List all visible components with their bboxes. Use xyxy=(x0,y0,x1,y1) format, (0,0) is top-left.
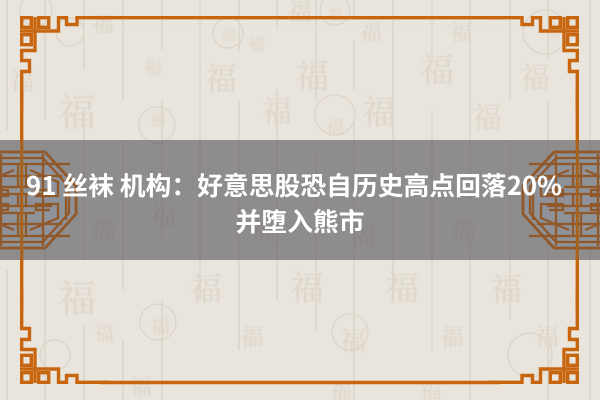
paper background with faint fu characters: 福 xyxy=(90,217,116,246)
paper background with faint fu characters: 福 xyxy=(248,35,265,54)
paper background with faint fu characters: 福 xyxy=(490,271,522,307)
paper background with faint fu characters: 福 xyxy=(221,27,236,44)
corner ornament: bottom right xyxy=(489,290,579,383)
frame lines across band xyxy=(22,140,577,260)
paper background with faint fu characters: 福 xyxy=(150,315,170,338)
paper background with faint fu characters: 福 xyxy=(450,217,476,246)
paper background with faint fu characters: 福 xyxy=(535,324,559,351)
paper background with faint fu characters: 福 xyxy=(295,59,329,96)
paper background with faint fu characters: 福 xyxy=(144,58,162,78)
left lattice medallion xyxy=(0,152,76,248)
corner ornament: top left xyxy=(20,17,110,110)
paper background with faint fu characters: 福 xyxy=(385,271,419,308)
right lattice medallion xyxy=(523,152,600,248)
paper background with faint fu characters: 福 xyxy=(472,102,502,135)
grey title band xyxy=(0,140,600,260)
paper background with faint fu characters: 福 xyxy=(130,375,152,400)
corner ornament: bottom left xyxy=(20,290,110,383)
paper background with faint fu characters: 福 xyxy=(350,222,376,251)
paper background with faint fu characters: 福 xyxy=(205,61,237,97)
paper background with faint fu characters: 福 xyxy=(420,53,454,90)
paper background with faint fu characters: 福 xyxy=(362,95,396,132)
corner ornament: top right xyxy=(489,17,579,110)
paper background with faint fu characters: 福 xyxy=(250,217,276,246)
paper background with faint fu characters: 福 xyxy=(520,62,550,95)
paper background with faint fu characters: 福 xyxy=(340,327,366,356)
paper background with faint fu characters: 福 xyxy=(150,111,166,129)
paper background with faint fu characters: 福 xyxy=(58,279,96,321)
paper background with faint fu characters: 福 xyxy=(290,271,324,308)
paper background with faint fu characters: 福 xyxy=(150,202,176,231)
paper background with faint fu characters: 福 xyxy=(94,322,114,345)
paper background with faint fu characters: 福 xyxy=(326,117,344,137)
paper background with faint fu characters: 福 xyxy=(10,69,34,96)
paper background with faint fu characters: 福 xyxy=(190,271,222,307)
title text: 并堕入熊市 xyxy=(236,202,364,239)
title text xyxy=(26,166,562,239)
paper background with faint fu characters: 福 xyxy=(440,324,464,351)
paper background with faint fu characters: 福 xyxy=(288,0,312,26)
paper background with faint fu characters: 福 xyxy=(92,12,114,37)
paper background with faint fu characters: 福 xyxy=(240,324,264,351)
paper background with faint fu characters: 福 xyxy=(360,20,382,45)
paper background with faint fu characters: 福 xyxy=(450,20,472,45)
paper background with faint fu characters: 福 xyxy=(328,7,343,24)
paper background with faint fu characters: 福 xyxy=(58,93,96,135)
paper background with faint fu characters: 福 xyxy=(262,96,292,129)
title text: 91 丝袜 机构：好意思股恐自历史高点回落20% xyxy=(26,166,562,203)
paper background with faint fu characters: 福 xyxy=(548,20,566,40)
